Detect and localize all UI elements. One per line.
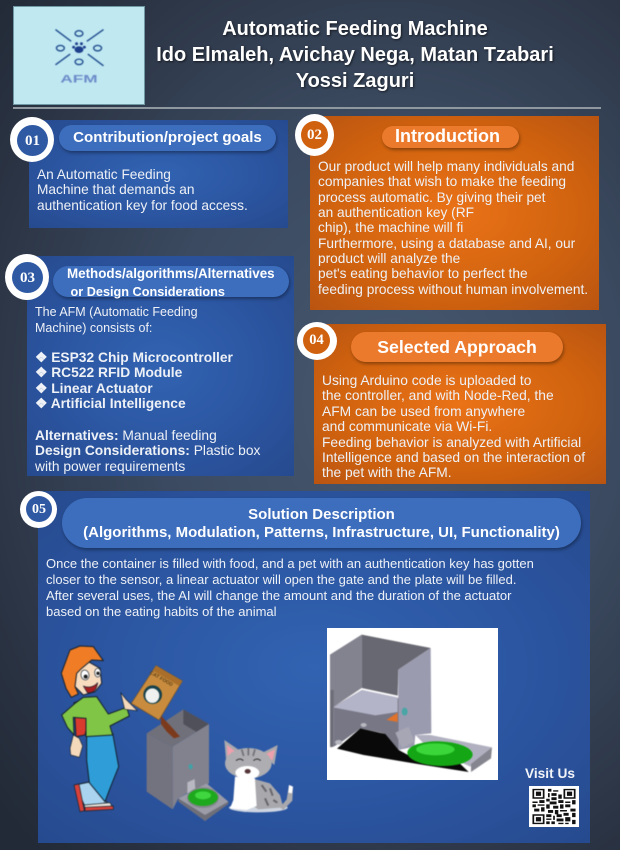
list: components: ❖ ESP32 Chip Microcontroller (35, 350, 233, 365)
text: introduction body: Furthermore, using a database and AI, our (318, 236, 575, 251)
lower mechanism (330, 690, 492, 772)
heading: solution description: Solution Description (248, 506, 395, 523)
text: solution body (46, 556, 534, 619)
heading: introduction: Introduction (395, 126, 500, 146)
text: introduction body: product will analyze the (318, 251, 460, 266)
badge: 04 (297, 322, 337, 360)
heading: methods: or Design Considerations (71, 284, 225, 298)
badge number 03 (12, 262, 43, 293)
heading: solution description (62, 498, 581, 548)
text: approach body: and communicate via Wi-Fi. (322, 419, 492, 434)
badge number 05: 05 (32, 502, 46, 517)
badge number 05 (26, 496, 52, 522)
badge: 03 (5, 254, 49, 300)
title: Ido Elmaleh, Avichay Nega, Matan Tzabari (156, 44, 554, 66)
heading: contribution goals (59, 125, 276, 151)
text: approach body: AFM can be used from anywhere (322, 404, 525, 419)
panel: 03 methods (27, 256, 294, 476)
text: introduction body (318, 159, 588, 297)
text: solution body: After several uses, the AI will change the amount and the duration of the actuator (46, 588, 511, 603)
logo (13, 6, 145, 105)
text: approach body: Intelligence and based on the interaction of (322, 450, 585, 465)
heading: introduction (382, 126, 519, 148)
icon: boy (61, 646, 137, 812)
text: alternatives and considerations: with power requirements (35, 459, 185, 474)
list: components (35, 350, 233, 411)
badge number 01 (17, 125, 48, 156)
text: alternatives and considerations: Design Considerations: Plastic box (35, 443, 260, 458)
text: visit us: Visit Us (525, 766, 575, 781)
badge number 02 (301, 121, 328, 149)
text: introduction body: pet's eating behavior to perfect the (318, 266, 528, 281)
text: methods intro: Machine) consists of: (35, 321, 152, 335)
text: approach body: Using Arduino code is uploaded to (322, 373, 531, 388)
text: introduction body: process automatic. By giving their pet (318, 190, 545, 205)
text: introduction body: chip), the machine will fi (318, 220, 463, 235)
panel: 04 selected approach (314, 324, 606, 484)
text: goals body: authentication key for food access. (37, 198, 248, 213)
heading: contribution goals: Contribution/project goals (73, 129, 262, 146)
badge number 04 (303, 327, 330, 354)
text: methods intro: The AFM (Automatic Feeding (35, 305, 198, 319)
text: goals body: An Automatic Feeding (37, 167, 171, 182)
icon: cat food bag: CAT FOOD (149, 670, 174, 688)
text: solution body: closer to the sensor, a linear actuator will open the gate and the plate will be filled. (46, 572, 516, 587)
list: components: ❖ Linear Actuator (35, 381, 153, 396)
text: approach body (322, 373, 586, 480)
icon: cat food bag (131, 666, 182, 720)
heading: methods (53, 266, 289, 297)
icon: QR code (529, 786, 579, 827)
heading: selected approach (351, 332, 563, 362)
text: goals body: Machine that demands an (37, 182, 195, 197)
badge: 01 (10, 117, 54, 162)
upper walls (330, 635, 431, 746)
header divider line (13, 107, 601, 109)
badge number 03: 03 (20, 270, 35, 286)
list: components: ❖ RC522 RFID Module (35, 365, 182, 380)
text: alternatives and considerations: Alternatives: Manual feeding (35, 428, 217, 443)
text: approach body: the pet with the AFM. (322, 465, 452, 480)
heading: selected approach: Selected Approach (377, 337, 537, 357)
icon: kitten (224, 740, 293, 812)
panel: 01 contribution goals (29, 120, 288, 228)
text: methods intro (35, 305, 198, 335)
text: approach body: the controller, and with Node-Red, the (322, 388, 554, 403)
text: introduction body: companies that wish to make the feeding (318, 174, 566, 189)
text: solution body: Once the container is filled with food, and a pet with an authentication key has gotten (46, 556, 534, 571)
panel: 05 solution description (38, 491, 590, 843)
text: introduction body: feeding process without human involvement. (318, 282, 588, 297)
heading: methods: Methods/algorithms/Alternatives (67, 266, 275, 281)
figure: CAD cutaway of feeder (327, 628, 498, 780)
title: Automatic Feeding Machine (222, 18, 488, 40)
badge: 05 (20, 491, 57, 528)
badge number 01: 01 (25, 133, 40, 149)
badge: 02 (295, 114, 334, 156)
text: approach body: Feeding behavior is analyzed with Artificial (322, 435, 581, 450)
panel: 02 introduction (310, 116, 599, 310)
logo: AFM (60, 73, 98, 85)
title (156, 18, 554, 93)
title: Yossi Zaguri (296, 70, 414, 92)
badge number 04: 04 (309, 332, 324, 348)
text: introduction body: an authentication key (RF (318, 205, 474, 220)
icon: feeder machine (147, 709, 228, 821)
text: alternatives and considerations (35, 428, 260, 474)
text: introduction body: Our product will help many individuals and (318, 159, 574, 174)
heading: solution description: (Algorithms, Modulation, Patterns, Infrastructure, UI, Functionality) (83, 524, 560, 540)
badge number 02: 02 (307, 127, 322, 143)
text: solution body: based on the eating habits of the animal (46, 604, 277, 619)
text: goals body (37, 167, 248, 213)
list: components: ❖ Artificial Intelligence (35, 396, 186, 411)
food stream (161, 715, 180, 738)
